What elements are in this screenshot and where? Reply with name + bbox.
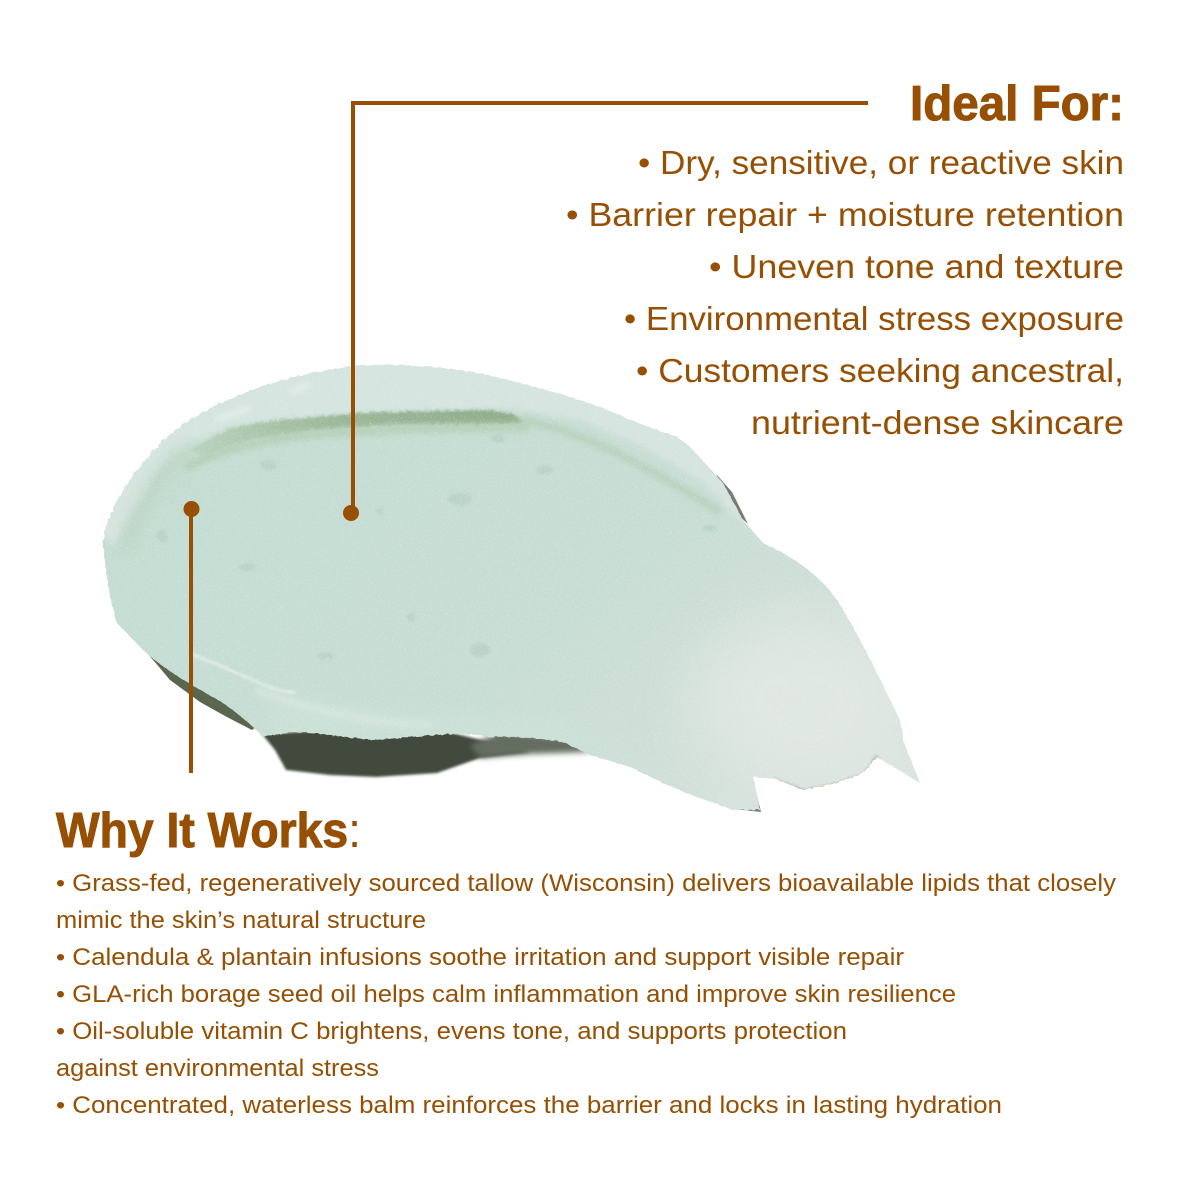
lower lip highlight bbox=[190, 654, 295, 692]
list: Why It Works: • Oil-soluble vitamin C brightens, evens tone, and supports protection bbox=[56, 1018, 847, 1045]
list: Ideal For: • Barrier repair + moisture retention bbox=[566, 196, 1124, 233]
list: Why It Works: • GLA-rich borage seed oil helps calm inflammation and improve skin resilience bbox=[56, 981, 956, 1008]
list: Ideal For: nutrient-dense skincare bbox=[751, 404, 1124, 441]
light right tip bbox=[694, 616, 884, 769]
surface grain bbox=[95, 360, 925, 820]
rim top shadow band bbox=[190, 410, 530, 458]
cast shadow: right edge bbox=[716, 474, 748, 524]
connector line: Ideal For bbox=[343, 103, 868, 521]
list: Why It Works bbox=[56, 870, 1117, 1119]
heading: Ideal For: Ideal For: bbox=[910, 77, 1124, 131]
rim shadow left bbox=[125, 446, 190, 550]
connector line: Why It Works bbox=[184, 501, 200, 773]
list: Ideal For: • Dry, sensitive, or reactive skin bbox=[638, 144, 1124, 181]
heading: Why It Works: Why It Works: bbox=[56, 804, 361, 858]
bubbles bbox=[157, 429, 718, 659]
cast shadow: bottom fade bbox=[470, 732, 590, 758]
cast shadow: bottom bbox=[262, 725, 530, 777]
lower lip crease bbox=[256, 689, 316, 708]
tip edge bbox=[770, 757, 878, 792]
rim shadow right bbox=[520, 420, 720, 512]
list: Why It Works: • Concentrated, waterless balm reinforces the barrier and locks in lasting hydration bbox=[56, 1092, 1002, 1119]
rim shine bbox=[219, 386, 305, 420]
list: Why It Works: • Grass-fed, regeneratively sourced tallow (Wisconsin) delivers bioavailable lipids that closely bbox=[56, 870, 1117, 897]
list: Ideal For: • Environmental stress exposure bbox=[624, 300, 1124, 337]
list: Why It Works: against environmental stress bbox=[56, 1055, 379, 1082]
lower lip band bbox=[269, 732, 579, 750]
list: Ideal For: • Customers seeking ancestral, bbox=[636, 352, 1124, 389]
raised rim bbox=[95, 358, 750, 545]
list: Ideal For: • Uneven tone and texture bbox=[709, 248, 1124, 285]
connector dot bbox=[343, 505, 359, 521]
list: Why It Works: mimic the skin’s natural structure bbox=[56, 907, 426, 934]
connector dot bbox=[184, 501, 200, 517]
list: Ideal For bbox=[566, 144, 1124, 441]
rim band fade bbox=[185, 426, 530, 468]
balm body bbox=[95, 358, 925, 820]
cast shadow: lower left bbox=[143, 648, 262, 730]
balm swatch bbox=[95, 358, 925, 820]
list: Why It Works: • Calendula & plantain infusions soothe irritation and support visible repair bbox=[56, 944, 904, 971]
cast shadow: notch bbox=[733, 800, 761, 812]
